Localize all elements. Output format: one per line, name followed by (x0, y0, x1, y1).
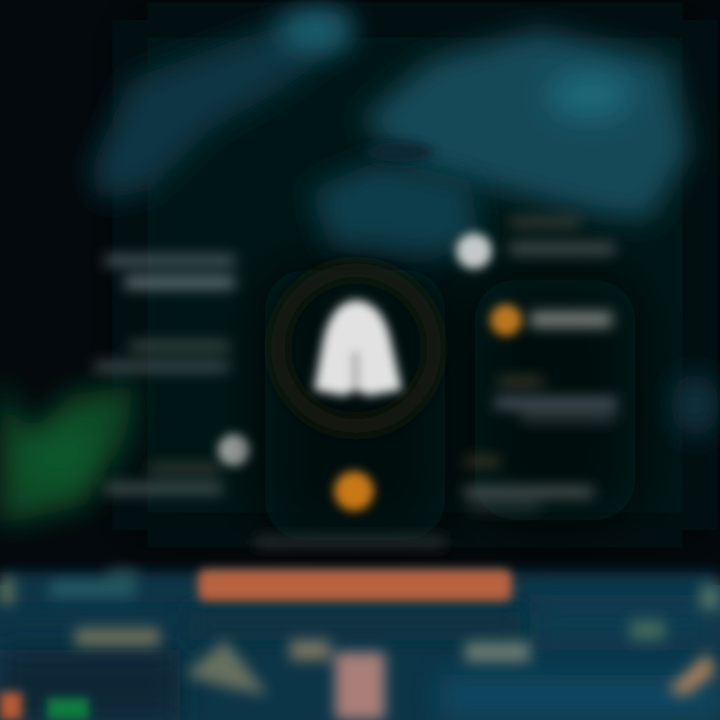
right text block 1 (530, 312, 612, 327)
left text block 1 (105, 256, 235, 288)
background: world map glow (90, 8, 719, 530)
footer labels: left (0, 570, 160, 646)
badge: green corner (47, 698, 89, 720)
footer panel: blue mosaic (0, 572, 720, 720)
panel: right dark card (475, 280, 635, 520)
footer banner: orange bar (198, 569, 512, 601)
right text block 3 (465, 458, 593, 510)
icon: orange central dot (334, 471, 374, 511)
badge: orange corner (0, 692, 22, 720)
footer labels: right (630, 585, 720, 696)
left text block 2 (95, 342, 230, 371)
central ring (278, 270, 434, 426)
icon: top-right white dot (456, 233, 492, 269)
icon: left white dot (218, 434, 250, 466)
right text block 2 (495, 378, 617, 421)
footer divider text (255, 537, 445, 547)
panel: central dark column (265, 270, 445, 540)
left text block 3 (105, 465, 223, 493)
icon: open book (314, 300, 402, 396)
plant: green leaves (0, 380, 135, 525)
icon: orange dot (490, 304, 522, 336)
right heading block (510, 218, 615, 254)
footer labels: centre (185, 640, 530, 720)
